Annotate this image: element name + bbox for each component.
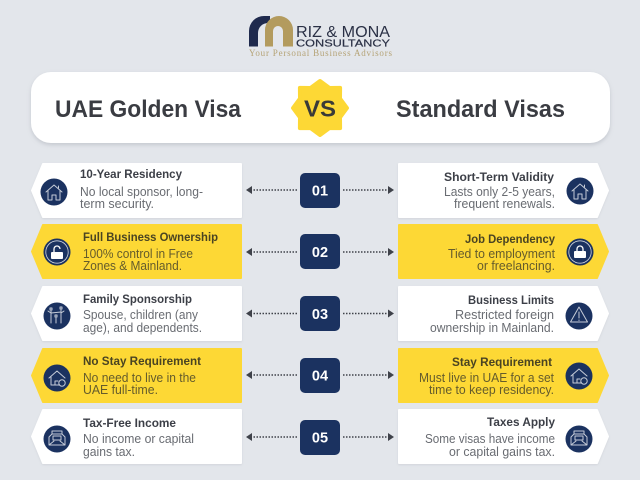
panel: Taxes Apply: Some visas have income [425,432,555,446]
panel: Job Dependency: Job Dependency [465,232,555,246]
panel: No Stay Requirement: No Stay Requirement [83,354,201,368]
number 03: 03 [312,307,328,323]
arrow right 3 [343,310,394,318]
icon: house with check [566,362,592,390]
row 4 [32,349,608,402]
arrow right 5 [343,433,394,441]
logo subtitle: CONSULTANCY [296,38,390,50]
number 02: 02 [312,245,328,261]
panel: Taxes Apply [399,410,608,463]
icon: house [566,178,594,204]
panel: No Stay Requirement: No need to live in the [83,371,196,385]
arrow left 1 [246,186,297,194]
icon: tax envelope [566,426,592,452]
icon: padlock [566,238,594,266]
panel: 10-Year Residency: No local sponsor, long- [80,185,203,199]
number 04 [300,358,340,393]
heading: UAE Golden Visa: UAE Golden Visa [55,96,242,123]
panel: Family Sponsorship [32,287,241,340]
icon: padlock owner [44,238,70,266]
arrow right 1 [343,186,394,194]
panel: No Stay Requirement: UAE full-time. [83,383,158,397]
number 05 [300,420,340,455]
panel: 10-Year Residency: 10-Year Residency [80,167,182,181]
panel: Taxes Apply: or capital gains tax. [449,445,555,459]
panel: Stay Requirement: time to keep residency. [429,383,554,397]
number 04: 04 [312,368,328,384]
number 05: 05 [312,430,328,446]
number 01: 01 [312,184,328,200]
number 01 [300,173,340,208]
panel: Job Dependency: Tied to employment [448,247,556,261]
heading: Standard Visas: Standard Visas [396,96,565,123]
panel: Taxes Apply: Taxes Apply [487,415,555,429]
panel: Tax-Free Income: gains tax. [83,445,135,459]
panel: Family Sponsorship: Family Sponsorship [83,292,192,306]
logo [249,16,392,58]
arrow right 2 [343,248,394,256]
panel: Job Dependency [399,225,608,278]
VS badge: VS [304,96,336,122]
row 5 [32,410,608,463]
row 1 [32,164,608,217]
number 02 [300,234,340,269]
arrow right 4 [343,371,394,379]
icon: warning triangle [566,302,592,330]
row 3 [32,287,608,340]
panel: Short-Term Validity: frequent renewals. [454,197,555,211]
panel: Stay Requirement: Stay Requirement [452,355,552,369]
panel: Business Limits: ownership in Mainland. [430,321,554,335]
row 2 [32,225,608,278]
panel: Short-Term Validity [399,164,608,217]
icon: family [44,302,70,330]
panel: Stay Requirement: Must live in UAE for a set [419,371,555,385]
panel: Tax-Free Income: Tax-Free Income [83,416,176,430]
arrow left 2 [246,248,297,256]
icon: house with check [44,364,70,392]
arrow left 4 [246,371,297,379]
icon: house [40,178,68,206]
panel: Business Limits [399,287,608,340]
panel: Tax-Free Income: No income or capital [83,432,194,446]
panel: Full Business Ownership: Zones & Mainland. [83,259,182,273]
VS badge [293,81,347,135]
logo mark: arches [249,16,293,46]
panel: Business Limits: Business Limits [468,293,554,307]
panel: Job Dependency: or freelancing. [477,259,555,273]
panel: Family Sponsorship: Spouse, children (any [83,308,199,322]
panel: Tax-Free Income [32,410,241,463]
icon: tax envelope [44,426,70,452]
number 03 [300,296,340,331]
panel: Full Business Ownership: Full Business Ownership [83,230,218,244]
panel: Stay Requirement [399,349,608,402]
arrow left 5 [246,433,297,441]
panel: Full Business Ownership: 100% control in Free [83,247,193,261]
panel: 10-Year Residency: term security. [80,197,154,211]
panel: Short-Term Validity: Lasts only 2-5 years, [444,185,555,199]
logo name: RIZ & MONA [296,24,391,41]
arrow left 3 [246,310,297,318]
panel: No Stay Requirement [32,349,241,402]
panel: 10-Year Residency [32,164,241,217]
panel: Full Business Ownership [32,225,241,278]
panel: Family Sponsorship: age), and dependents. [83,321,202,335]
panel: Short-Term Validity: Short-Term Validity [444,170,554,184]
panel: Business Limits: Restricted foreign [455,308,554,322]
header panel [31,72,610,143]
logo tagline: Your Personal Business Advisors [249,48,392,58]
